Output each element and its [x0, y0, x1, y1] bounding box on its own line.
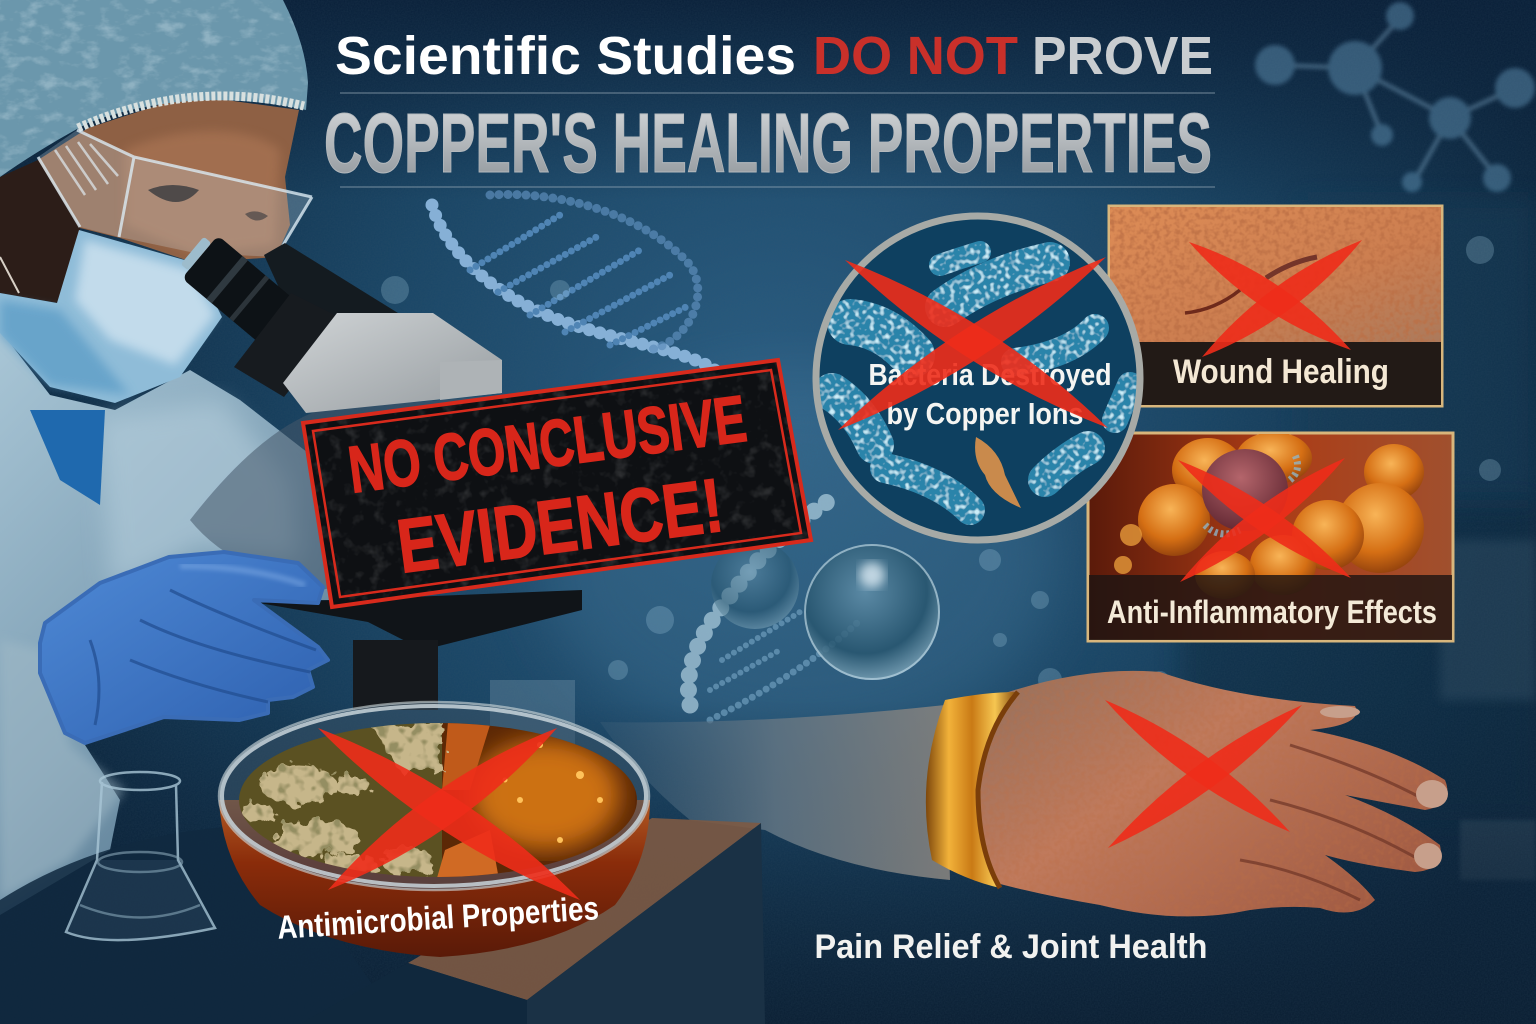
- rear eyepiece: [264, 243, 398, 320]
- stamp text: NO CONCLUSIVE: [344, 381, 750, 507]
- DNA helix lower: [688, 500, 860, 720]
- wound label: Wound Healing: [1173, 353, 1389, 391]
- stamp text: EVIDENCE!: [393, 463, 728, 590]
- dish rim: [219, 702, 649, 890]
- arm and hand with copper bracelet: [600, 670, 1448, 916]
- red X marks: [318, 240, 1362, 900]
- stamp text: [344, 381, 762, 595]
- scientist: [0, 0, 345, 915]
- microbial colonies: [242, 722, 442, 877]
- surgical mask: [0, 230, 222, 403]
- inflammatory label: Anti-Inflammatory Effects: [1107, 594, 1437, 630]
- neck and back of head: [0, 160, 80, 303]
- petri label: Antimicrobial Properties: [276, 889, 600, 946]
- grey head: [283, 313, 502, 413]
- title: [324, 26, 1215, 190]
- copper bracelet: [926, 692, 1018, 888]
- X over wound: [1189, 240, 1362, 357]
- arm: [190, 395, 500, 590]
- front eyepiece: [174, 229, 302, 349]
- molecule network: [1255, 2, 1535, 192]
- bacteria label: Bacteria Destroyed: [868, 357, 1112, 392]
- X over hand: [1105, 700, 1302, 848]
- black collar: [234, 293, 345, 397]
- panel: wound healing: [1109, 206, 1442, 406]
- X over inflammation: [1178, 458, 1351, 582]
- title: DO NOT: [813, 26, 1018, 86]
- sparks: [502, 742, 603, 843]
- goggles: [38, 130, 312, 257]
- face: [38, 95, 299, 263]
- hand: [975, 671, 1448, 916]
- X over bacteria: [838, 257, 1108, 430]
- pain relief label: Pain Relief & Joint Health: [814, 928, 1208, 966]
- petri dish: [219, 702, 650, 957]
- lab coat: [0, 330, 345, 915]
- blue scrubs: [30, 410, 105, 505]
- glass spheres: [711, 541, 940, 680]
- gloved hand: [40, 552, 328, 743]
- title: Scientific Studies: [335, 26, 796, 86]
- stamp: no conclusive evidence: [300, 355, 815, 610]
- X over petri dish: [318, 728, 580, 900]
- hair net: [0, 0, 308, 177]
- flask: [66, 772, 215, 940]
- forearm: [600, 705, 950, 880]
- dish side: [219, 800, 650, 957]
- lab table: [0, 818, 765, 1024]
- bacteria label: [868, 357, 1112, 431]
- DNA helix upper: [432, 194, 745, 420]
- eye: [148, 185, 199, 202]
- ear loop: [0, 257, 19, 293]
- panel: bacteria circle: [815, 215, 1141, 541]
- stage and base: [259, 590, 582, 650]
- bokeh lights: [381, 236, 1501, 692]
- panel: anti-inflammatory: [1088, 432, 1453, 641]
- title: PROVE: [1032, 26, 1213, 86]
- microscope: [174, 229, 582, 745]
- bacteria label: by Copper Ions: [886, 396, 1084, 431]
